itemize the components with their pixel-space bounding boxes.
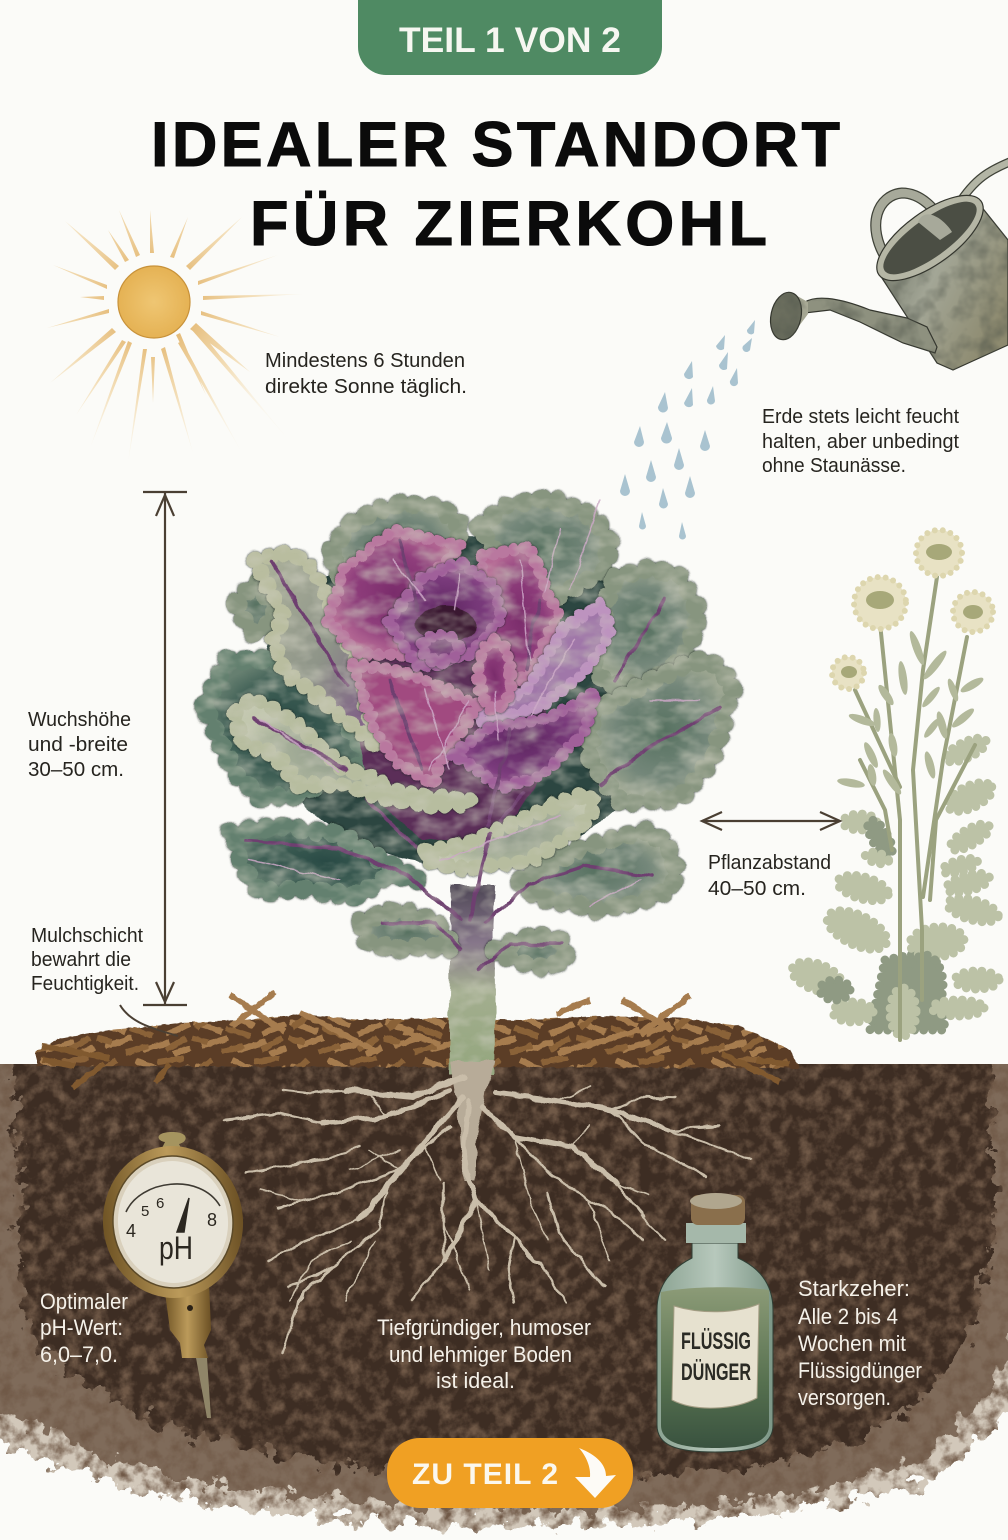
button: to part 2 [387, 1438, 633, 1508]
mulch callout line [120, 1005, 178, 1036]
text: fertilizer: Flüssigdünger [798, 1358, 922, 1383]
text: pH value: pH-Wert: [40, 1315, 123, 1340]
icon: fertilizer bottle: FLÜSSIG [681, 1328, 751, 1355]
arrow: plant spacing [702, 812, 840, 830]
neighbouring flowering plant [788, 530, 1001, 1040]
text: fertilizer [798, 1276, 922, 1410]
text: sun requirement: Mindestens 6 Stunden [265, 350, 465, 372]
text: mulch [31, 925, 143, 995]
icon: watering can [766, 161, 1008, 370]
text: mulch: Mulchschicht [31, 925, 143, 947]
pale lower leaves [236, 698, 596, 869]
title: FÜR ZIERKOHL [250, 189, 767, 259]
text: fertilizer: Starkzeher: [798, 1276, 910, 1301]
text: pH value: 6,0–7,0. [40, 1342, 118, 1367]
text: plant spacing: Pflanzabstand [708, 852, 831, 874]
text: soil: ist ideal. [436, 1368, 515, 1393]
soil panel [0, 1040, 1008, 1526]
text: soil: und lehmiger Boden [389, 1342, 572, 1367]
leaf veins [247, 500, 719, 969]
icon: pH meter: 5 [141, 1203, 149, 1220]
outer leaves [204, 497, 734, 968]
illustration: roots [225, 1062, 752, 1353]
text: watering: Erde stets leicht feucht [762, 406, 959, 428]
icon: pH meter: 4 [126, 1221, 136, 1241]
flower heads [832, 530, 993, 689]
dark purple mass [347, 641, 560, 840]
top badge: part 1 of 2 [358, 0, 662, 75]
text: plant spacing: 40–50 cm. [708, 878, 806, 900]
text: fertilizer: versorgen. [798, 1385, 891, 1410]
stem [449, 885, 496, 1076]
text: sun requirement: direkte Sonne täglich. [265, 376, 467, 398]
text: pH value [40, 1289, 128, 1367]
icon: fertilizer bottle: DÜNGER [681, 1359, 751, 1386]
water drops [620, 320, 755, 540]
icon: pH meter: 8 [207, 1210, 217, 1230]
text: height: und -breite [28, 734, 128, 756]
title [151, 110, 840, 259]
illustration: ornamental kale [204, 497, 734, 1076]
stems [855, 577, 975, 1040]
icon: curved arrow [575, 1448, 616, 1498]
text: watering [762, 406, 959, 477]
text: plant spacing [708, 852, 831, 900]
icon: pH meter: pH [159, 1230, 193, 1266]
top badge: part 1 of 2: TEIL 1 VON 2 [399, 21, 621, 60]
text: soil [377, 1315, 591, 1393]
text: height [28, 709, 131, 781]
mulch layer [36, 992, 800, 1088]
pale upper-left leaf [255, 553, 376, 745]
text: mulch: bewahrt die [31, 949, 131, 971]
icon: fertilizer bottle [657, 1193, 773, 1452]
icon: sun [47, 210, 303, 463]
purple heart [328, 530, 610, 851]
text: height: Wuchshöhe [28, 709, 131, 731]
lower foliage [788, 733, 1001, 1036]
dark backing [257, 535, 667, 865]
text: pH value: Optimaler [40, 1289, 128, 1314]
text: height: 30–50 cm. [28, 759, 124, 781]
narrow upper leaves [837, 630, 985, 797]
text: fertilizer: Alle 2 bis 4 [798, 1304, 898, 1329]
text: sun requirement [265, 350, 467, 398]
icon: pH meter: 6 [156, 1195, 164, 1212]
button: to part 2: ZU TEIL 2 [412, 1458, 558, 1491]
title: IDEALER STANDORT [151, 110, 840, 180]
text: mulch: Feuchtigkeit. [31, 973, 139, 995]
text: soil: Tiefgründiger, humoser [377, 1315, 591, 1340]
text: watering: ohne Staunässe. [762, 455, 906, 477]
icon: pH meter [97, 1132, 249, 1418]
arrow: height dimension [143, 492, 187, 1005]
text: watering: halten, aber unbedingt [762, 431, 959, 453]
text: fertilizer: Wochen mit [798, 1331, 906, 1356]
